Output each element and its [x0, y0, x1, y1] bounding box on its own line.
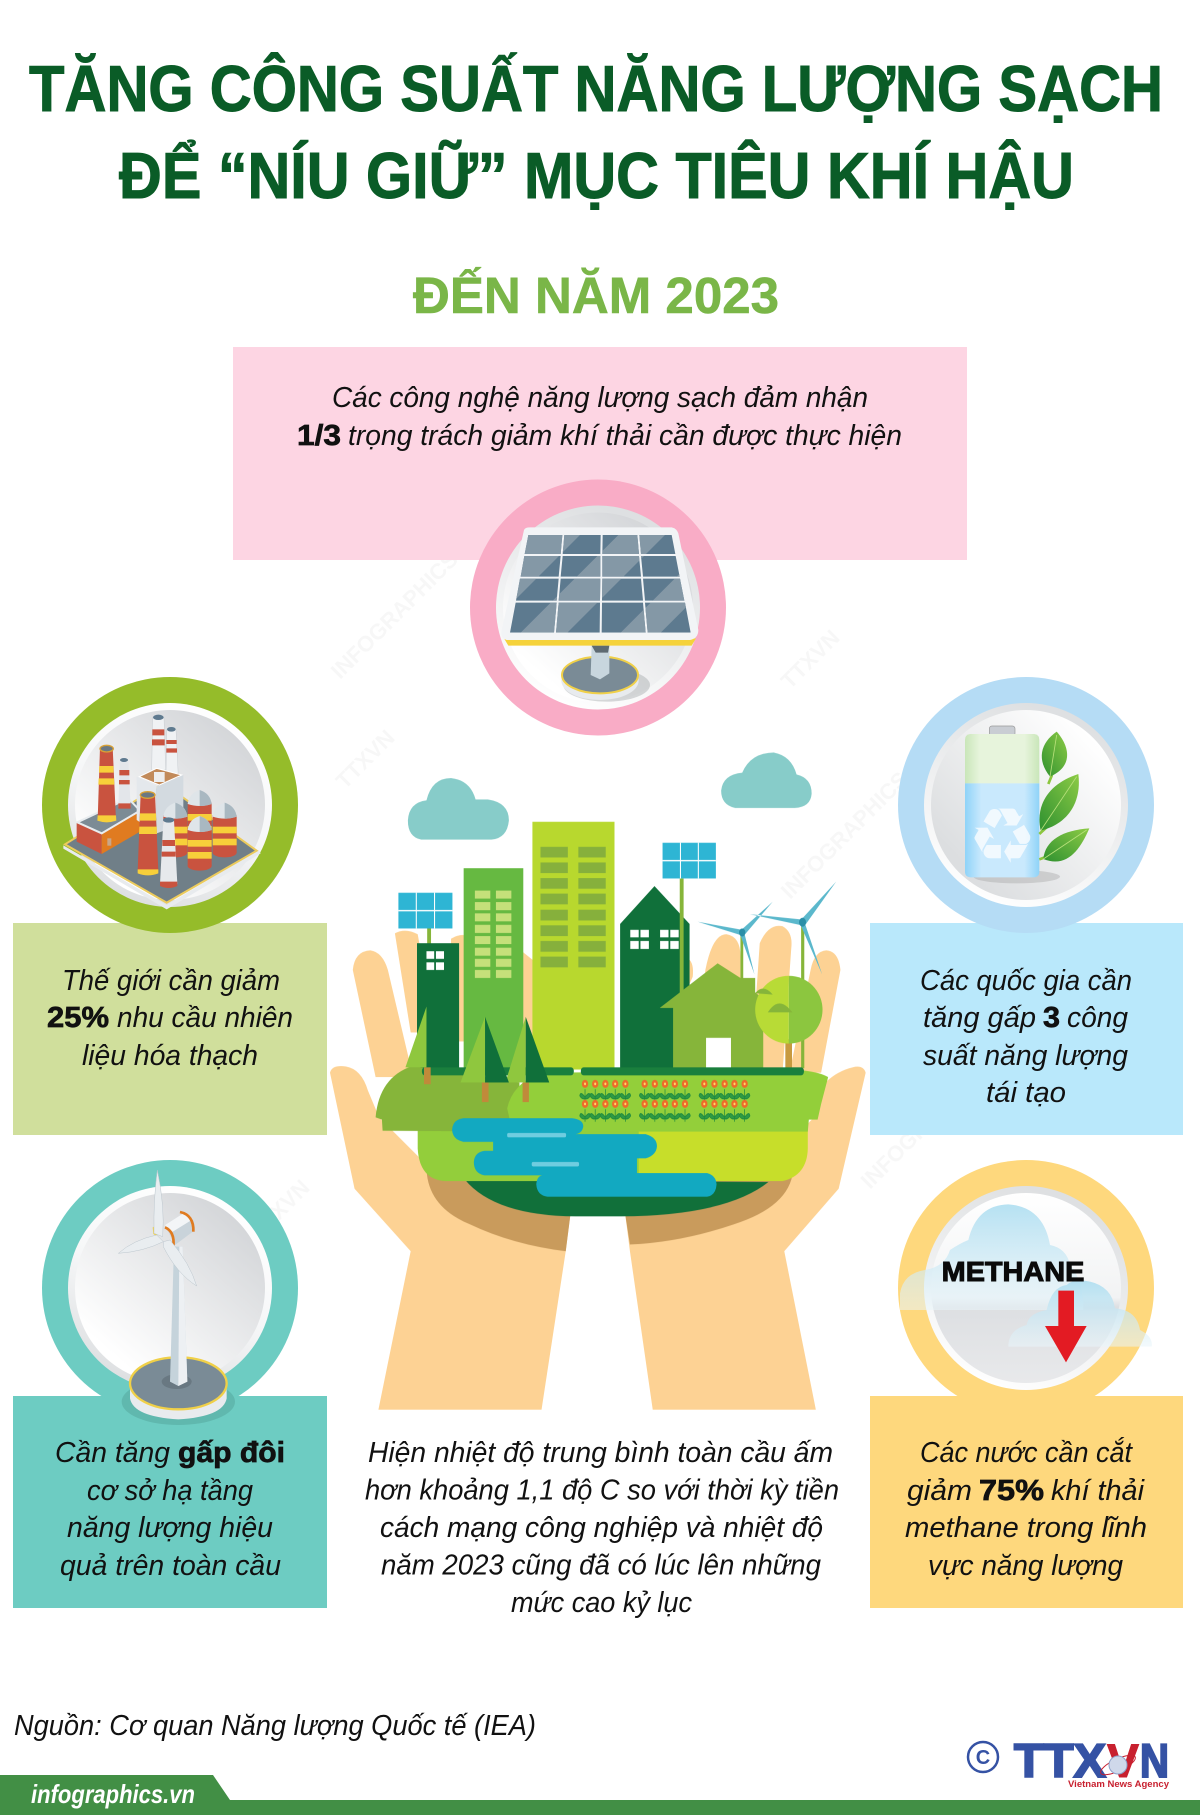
text: methane: methane trong lĩnh [905, 1512, 1147, 1544]
logo: TTXVN: TTX [1014, 1734, 1106, 1787]
text: global temperature note: mức cao kỷ lục [511, 1587, 692, 1619]
watermarks: INFOGRAPHICS [856, 1057, 993, 1194]
text: double efficiency: gấp đôi [178, 1437, 285, 1469]
right hand [625, 926, 866, 1410]
text: triple renewables: tái tạo [986, 1077, 1066, 1109]
text: clean tech one third [297, 382, 902, 452]
text: methane: giảm [907, 1475, 972, 1507]
text: global temperature note: hơn khoảng 1,1 độ C so với thời kỳ tiền [365, 1474, 839, 1506]
building dark left [417, 943, 459, 1070]
text: methane: vực năng lượng [928, 1550, 1123, 1582]
title [29, 52, 1163, 212]
text: clean tech one third: trọng trách giảm khí thải cần được thực hiện [348, 420, 902, 452]
text: global temperature note: Hiện nhiệt độ trung bình toàn cầu ấm [368, 1437, 833, 1469]
text: global temperature note: cách mạng công nghiệp và nhiệt độ [380, 1512, 823, 1544]
solar panel right [663, 843, 716, 995]
text: clean tech one third: Các công nghệ năng lượng sạch đảm nhận [332, 382, 868, 414]
icon: methane clouds and arrow: METHANE [942, 1256, 1084, 1287]
logo: TTXVN: Vietnam News Agency [1068, 1779, 1170, 1790]
icon: methane clouds and arrow [900, 1204, 1152, 1362]
panel: fossil fuel demand [13, 677, 327, 1135]
footer bar [0, 1775, 1200, 1815]
source: Nguồn: Cơ quan Năng lượng Quốc tế (IEA) [14, 1710, 536, 1742]
logo: TTXVN: V [1107, 1734, 1140, 1787]
building green [464, 868, 523, 1069]
island body [418, 1126, 808, 1181]
flower beds [580, 1080, 750, 1122]
lake [452, 1118, 717, 1197]
text: double efficiency [55, 1437, 285, 1582]
round tree [755, 976, 823, 1068]
footer bar: infographics.vn [31, 1779, 195, 1809]
wind turbines [698, 882, 836, 1068]
building dark pitched [620, 886, 690, 1070]
text: triple renewables: suất năng lượng [923, 1040, 1128, 1072]
icon: battery with leaves: ♻ [968, 793, 1037, 882]
text: global temperature note: năm 2023 cũng đã có lúc lên những [381, 1550, 821, 1582]
subtitle: ĐẾN NĂM 2023 [413, 266, 779, 324]
text: triple renewables: công [1067, 1002, 1128, 1034]
text: triple renewables: Các quốc gia cần [920, 965, 1132, 997]
text: double efficiency: quả trên toàn cầu [60, 1550, 281, 1582]
text: clean tech one third: 1/3 [297, 420, 341, 452]
icon: battery with leaves [965, 726, 1089, 883]
text: fossil fuel: nhu cầu nhiên [117, 1002, 293, 1034]
text: methane [905, 1436, 1147, 1582]
panel: clean energy share [233, 347, 967, 736]
title: ĐỂ “NÍU GIỮ” MỤC TIÊU KHÍ HẬU [119, 139, 1074, 212]
watermarks: INFOGRAPHICS [776, 767, 913, 904]
watermarks: TTXVN [331, 725, 400, 794]
logo: TTXVN: N [1140, 1734, 1169, 1787]
logo: TTXVN: C [976, 1747, 990, 1769]
pine trees [405, 1007, 549, 1102]
hand shadow [426, 1166, 793, 1251]
left hand [330, 931, 570, 1410]
text: triple renewables: tăng gấp [923, 1002, 1036, 1034]
watermarks: TTXVN [246, 1175, 315, 1244]
text: methane: Các nước cần cắt [920, 1436, 1134, 1469]
grass top [376, 1066, 828, 1132]
solar panel left [398, 893, 452, 945]
icon: wind turbine [118, 1170, 235, 1425]
text: triple renewables: 3 [1043, 1002, 1060, 1034]
text: methane: khí thải [1051, 1475, 1146, 1507]
watermarks: TTXVN [776, 625, 845, 694]
panel: renewable capacity [870, 677, 1183, 1135]
house [660, 963, 763, 1070]
panel: methane cut [870, 1160, 1183, 1608]
text: double efficiency: năng lượng hiệu [67, 1512, 273, 1544]
text: fossil fuel [47, 965, 293, 1072]
icon: clouds [408, 753, 812, 840]
watermarks [246, 547, 993, 1244]
text: global temperature note [365, 1437, 839, 1619]
text: triple renewables [920, 965, 1132, 1109]
building lime [532, 822, 614, 1070]
logo: TTXVN [968, 1734, 1170, 1790]
text: double efficiency: cơ sở hạ tầng [87, 1475, 253, 1507]
icon: solar panel [504, 527, 698, 702]
watermarks: INFOGRAPHICS [326, 547, 463, 684]
island base [465, 1180, 769, 1216]
text: double efficiency: Cần tăng [55, 1437, 170, 1469]
text: methane: 75% [979, 1475, 1044, 1507]
text: fossil fuel: 25% [47, 1002, 109, 1034]
text: fossil fuel: liệu hóa thạch [82, 1040, 258, 1072]
text: fossil fuel: Thế giới cần giảm [62, 965, 280, 997]
central illustration: hands holding green city [330, 753, 866, 1410]
icon: factory [63, 715, 261, 909]
panel: energy efficiency [13, 1160, 327, 1608]
